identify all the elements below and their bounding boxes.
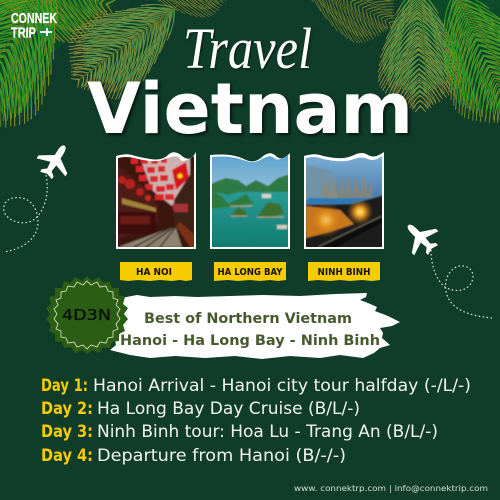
itinerary (41, 376, 471, 465)
day 1: Hanoi Arrival - Hanoi city tour halfday (-/L/-) (93, 376, 471, 395)
banner text: Best of Northern Vietnam (144, 311, 352, 327)
label: Ha Long Bay (214, 262, 286, 281)
photo: Ninh Binh (304, 152, 384, 249)
title: Vietnam: Vietnam (87, 68, 413, 150)
photo: Ha Long Bay (210, 153, 290, 249)
day 4: Departure from Hanoi (B/-/-) (97, 446, 346, 465)
photo: Ha Noi (116, 152, 196, 249)
icon: right plane (396, 213, 445, 262)
logo: TRIP (11, 26, 36, 42)
day 3: Day 3: (41, 422, 93, 441)
palm fronds: top left (0, 0, 238, 153)
dashed flight path right (431, 250, 492, 318)
icon: left plane (32, 137, 79, 184)
label: Ha Noi: HA NOI (136, 267, 172, 278)
logo (11, 11, 57, 42)
label: Ninh Binh (308, 262, 380, 281)
label: Ha Noi (120, 262, 192, 281)
day 2: Day 2: (41, 399, 93, 418)
banner text: Hanoi - Ha Long Bay - Ninh Binh (120, 333, 380, 349)
day 4: Day 4: (41, 446, 93, 465)
brush banner (110, 293, 400, 359)
badge: 4D3N: 4D3N (62, 306, 111, 324)
day 3: Ninh Binh tour: Hoa Lu - Trang An (B/L/-) (97, 422, 438, 441)
title: Travel: Travel (183, 16, 312, 81)
label: Ha Long Bay: HA LONG BAY (218, 267, 283, 278)
label: Ninh Binh: NINH BINH (318, 267, 370, 278)
palm fronds: top right (288, 0, 500, 143)
badge: 4D3N (46, 276, 128, 354)
day 1: Day 1: (41, 376, 88, 395)
banner text (120, 311, 380, 349)
day 2: Ha Long Bay Day Cruise (B/L/-) (97, 399, 360, 418)
footer contact: www. connektrp.com | info@connektrip.com (294, 484, 488, 493)
dashed flight path left (4, 175, 47, 252)
logo: CONNEK (11, 11, 57, 27)
